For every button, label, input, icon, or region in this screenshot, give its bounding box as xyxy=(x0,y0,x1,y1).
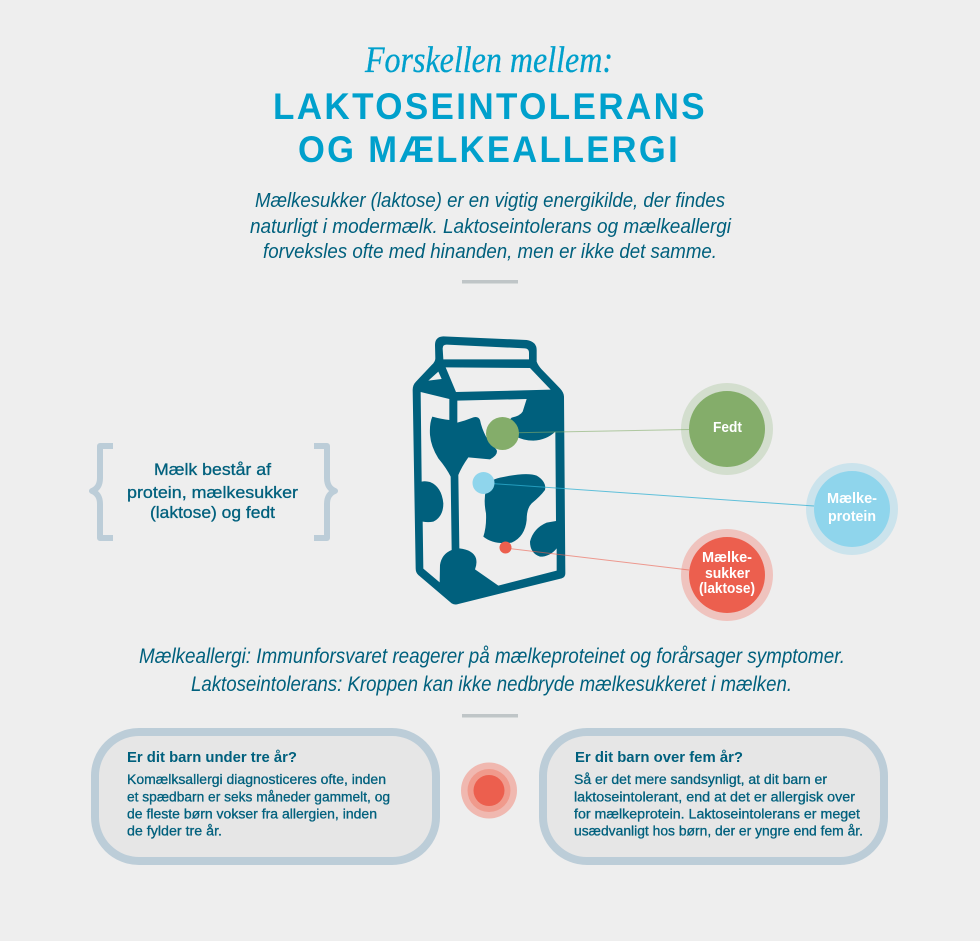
bracket text: milk composition xyxy=(92,446,335,538)
connector line: fat xyxy=(502,430,689,433)
panel body text: laktoseintolerant, end at det er allergisk over xyxy=(574,790,856,804)
bubble: Mælkesukker: Mælke- xyxy=(702,550,752,566)
panel body text: et spædbarn er seks måneder gammelt, og xyxy=(127,790,390,804)
bubble: Mælkeprotein xyxy=(806,463,898,555)
panel body text: Så er det mere sandsynligt, at dit barn er xyxy=(574,772,828,787)
icon: milk carton xyxy=(413,336,565,605)
panel body text xyxy=(574,772,863,838)
bubble: Fedt: Fedt xyxy=(713,420,742,436)
panel: under three years xyxy=(95,732,436,861)
panel heading: Er dit barn under tre år? xyxy=(127,749,297,766)
dot: protein xyxy=(472,472,494,494)
panel body text: Komælksallergi diagnosticeres ofte, inden xyxy=(127,772,386,787)
title xyxy=(273,40,707,170)
bubble: Mælkesukker: (laktose) xyxy=(699,581,755,597)
panel body text: de fleste børn vokser fra allergien, inden xyxy=(127,806,377,822)
panel: over five years xyxy=(543,732,884,861)
intro text xyxy=(250,190,732,263)
bubble: Mælkeprotein: protein xyxy=(828,509,876,525)
bubble: Mælkeprotein: Mælke- xyxy=(827,491,877,507)
panel body text: for mælkeprotein. Laktoseintolerans er meget xyxy=(574,806,860,822)
definitions text: Mælkeallergi: Immunforsvaret reagerer på mælkeproteinet og forårsager symptomer. xyxy=(139,645,845,668)
intro text: Mælkesukker (laktose) er en vigtig energikilde, der findes xyxy=(255,190,725,212)
intro text: naturligt i modermælk. Laktoseintolerans og mælkeallergi xyxy=(250,216,732,238)
panel body text: de fylder tre år. xyxy=(127,824,222,838)
panel heading: Er dit barn over fem år? xyxy=(575,749,743,766)
main heading line 2: OG MÆLKEALLERGI xyxy=(298,129,680,170)
dot: lactose xyxy=(500,542,512,554)
definitions text: Laktoseintolerans: Kroppen kan ikke nedbryde mælkesukkeret i mælken. xyxy=(191,673,792,696)
bubble: Mælkesukker xyxy=(681,529,773,621)
bracket text: milk composition: (laktose) og fedt xyxy=(150,503,275,522)
bubble: Fedt xyxy=(681,383,773,475)
dot: fat xyxy=(486,417,519,450)
panel body text: usædvanligt hos børn, der er yngre end fem år. xyxy=(574,824,863,838)
main heading line 1: LAKTOSEINTOLERANS xyxy=(273,86,707,127)
definitions text xyxy=(139,645,845,696)
bracket text: milk composition: Mælk består af xyxy=(154,460,271,479)
connector line: lactose xyxy=(505,548,689,570)
connector line: protein xyxy=(484,483,814,506)
panel body text xyxy=(127,772,390,838)
icon: red bullseye xyxy=(461,762,517,818)
icon: left curly bracket xyxy=(92,446,113,538)
icon: right curly bracket xyxy=(314,446,335,538)
bubble: Mælkesukker: sukker xyxy=(705,566,750,582)
bracket text: milk composition: protein, mælkesukker xyxy=(127,483,298,502)
intro text: forveksles ofte med hinanden, men er ikke det samme. xyxy=(263,241,717,263)
script heading: Forskellen mellem: xyxy=(364,40,613,81)
